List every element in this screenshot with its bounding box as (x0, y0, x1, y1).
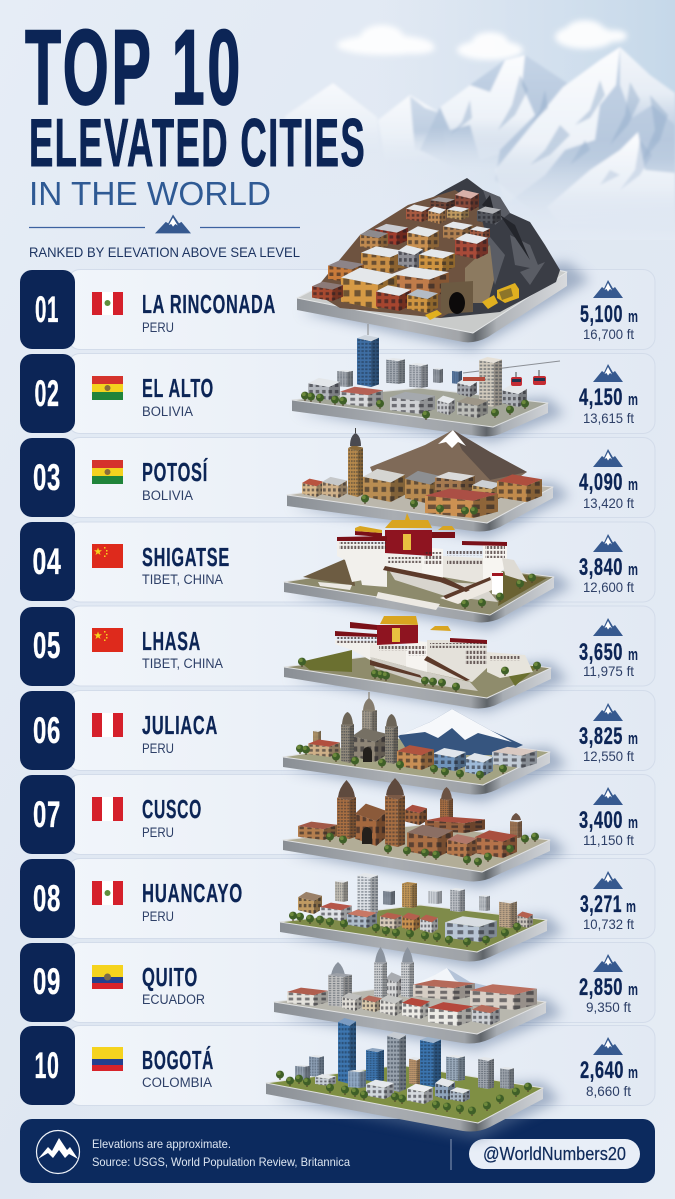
row 06 (20, 690, 655, 770)
row 04: 04 (32, 541, 62, 582)
city model: Bogotá (266, 1018, 560, 1140)
row 08: m (626, 897, 636, 916)
row 03: 4,090 (579, 469, 623, 496)
flag: Bolivia (92, 460, 123, 484)
row 02: 4,150 (579, 384, 623, 411)
row 04: TIBET, CHINA (142, 572, 223, 587)
row 10: 8,660 ft (586, 1083, 631, 1099)
row 09: 09 (33, 961, 61, 1002)
clouds (337, 20, 627, 60)
row 06: JULIACA (142, 710, 218, 740)
divider with mountain icon (29, 214, 300, 233)
row 10: 10 (34, 1045, 60, 1086)
heading: elevated cities: ELEVATED CITIES (29, 105, 366, 181)
handle pill (469, 1139, 640, 1169)
row 07: PERU (142, 825, 174, 840)
row 02: EL ALTO (142, 373, 214, 403)
row 05: m (628, 645, 638, 664)
heading: top 10: TOP 10 (25, 7, 243, 127)
row 08: PERU (142, 909, 174, 924)
background: snowy mountain range and clouds (250, 20, 675, 240)
row 08: 08 (33, 878, 61, 919)
flag: Bolivia (92, 376, 123, 400)
row 06: 06 (33, 710, 61, 751)
row 06: PERU (142, 741, 174, 756)
row 09 (20, 942, 655, 1022)
city model: El Alto (292, 324, 565, 442)
flag: Peru (92, 713, 123, 737)
row 03 (20, 438, 655, 518)
flag: China (92, 628, 123, 652)
row 02: m (628, 390, 638, 409)
row 01: 01 (35, 289, 59, 330)
row 06: 12,550 ft (583, 748, 634, 764)
far peaks (285, 47, 675, 235)
row 06: m (628, 729, 638, 748)
row 03: POTOSÍ (142, 457, 208, 487)
row 08: 10,732 ft (583, 916, 634, 932)
row 02: BOLIVIA (142, 404, 193, 419)
row 04: 12,600 ft (583, 579, 634, 595)
row 01: m (628, 307, 638, 326)
row 03: 13,420 ft (583, 495, 634, 511)
row 10 (20, 1026, 655, 1106)
row 08 (20, 858, 655, 938)
row 02 (20, 354, 655, 434)
flag: Ecuador (92, 965, 123, 989)
city model: Lhasa (284, 616, 568, 712)
row 07: m (628, 813, 638, 832)
row 08: 3,271 (580, 891, 622, 918)
city model: Juliaca (283, 692, 567, 802)
flag: Colombia (92, 1047, 123, 1071)
row 09: m (628, 980, 638, 999)
row 04: SHIGATSE (142, 542, 230, 572)
row 01: PERU (142, 320, 174, 335)
row 04: 3,840 (579, 554, 623, 581)
row 05 (20, 606, 655, 686)
row 01: 16,700 ft (583, 326, 634, 342)
row 09: 9,350 ft (586, 999, 631, 1015)
row 10: 2,640 (580, 1057, 624, 1084)
city model: Shigatse (284, 513, 572, 630)
row 07: 3,400 (579, 807, 623, 834)
city model: Quito (274, 947, 563, 1050)
row 07: 11,150 ft (583, 832, 634, 848)
row 08: HUANCAYO (142, 878, 243, 908)
row 07 (20, 774, 655, 854)
row 07: CUSCO (142, 794, 202, 824)
flag: Peru (92, 292, 123, 315)
row 01: 5,100 (580, 301, 623, 328)
source: Source: USGS, World Population Review, Britannica (92, 1155, 350, 1169)
row 05: 11,975 ft (583, 663, 634, 679)
row 09: QUITO (142, 962, 198, 992)
row 03: m (628, 475, 638, 494)
row 01 (20, 270, 655, 350)
panel: ranking rows (20, 270, 655, 1106)
footnote: Elevations are approximate. (92, 1137, 231, 1151)
flag: Peru (92, 797, 123, 821)
row 04 (20, 522, 655, 602)
row 02: 02 (34, 373, 60, 414)
title (25, 7, 366, 260)
city model: La Rinconada (297, 178, 590, 350)
row 05: 05 (33, 625, 61, 666)
row 05: TIBET, CHINA (142, 656, 223, 671)
row 10: m (628, 1063, 638, 1082)
icon: mountain logo (36, 1130, 80, 1174)
city model: Cusco (283, 778, 567, 888)
row 02: 13,615 ft (583, 410, 634, 426)
handle pill: @WorldNumbers20 (483, 1144, 626, 1164)
flag: Peru (92, 881, 123, 905)
flag: China (92, 544, 123, 568)
row 09: 2,850 (579, 974, 623, 1001)
subtitle: RANKED BY ELEVATION ABOVE SEA LEVEL (29, 244, 300, 260)
row 03: BOLIVIA (142, 488, 193, 503)
row 10: BOGOTÁ (142, 1045, 214, 1075)
row 05: 3,650 (579, 639, 623, 666)
row 04: m (628, 560, 638, 579)
footer bar (20, 1119, 655, 1183)
heading: in the world: IN THE WORLD (29, 176, 271, 213)
row 05: LHASA (142, 626, 201, 656)
city model: Potosí (287, 428, 570, 538)
city model: Huancayo (280, 873, 564, 968)
row 03: 03 (33, 457, 61, 498)
row 07: 07 (33, 794, 61, 835)
row 01: LA RINCONADA (142, 289, 276, 319)
row 09: ECUADOR (142, 992, 205, 1007)
row 06: 3,825 (579, 723, 623, 750)
row 10: COLOMBIA (142, 1075, 212, 1090)
